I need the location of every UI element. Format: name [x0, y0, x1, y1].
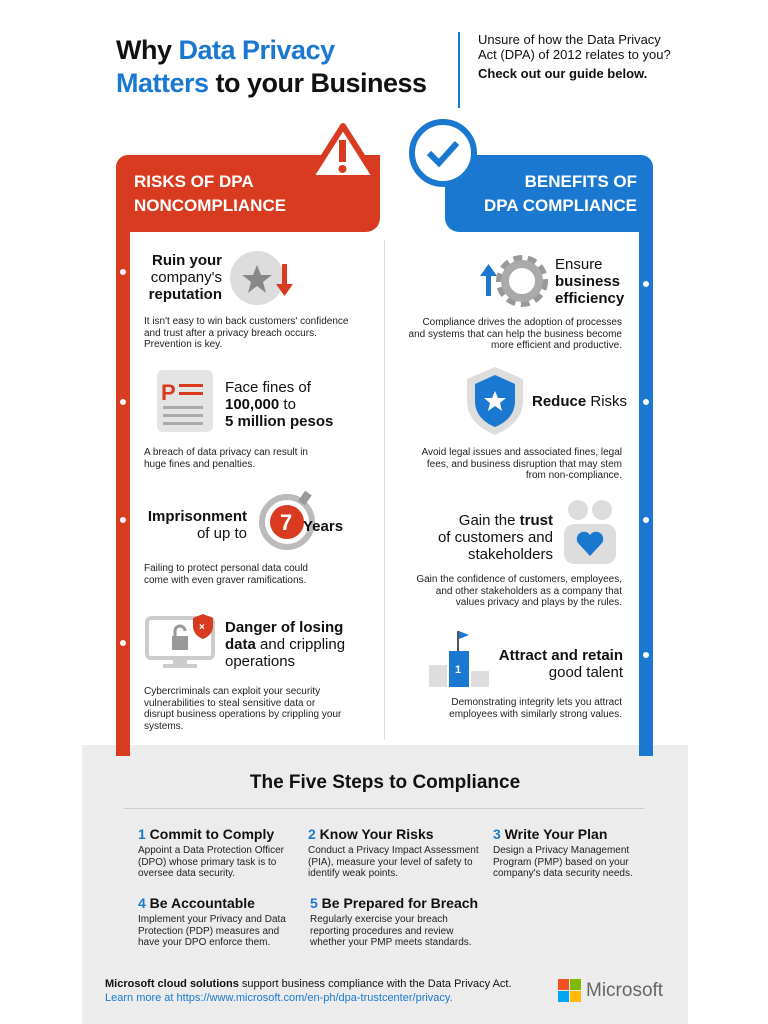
title — [116, 35, 427, 98]
icon: people heart — [564, 500, 616, 564]
risks heading — [116, 155, 380, 232]
risk 3: Years — [303, 518, 343, 535]
benefit 3: of customers and — [438, 529, 553, 546]
panel: benefits — [409, 119, 653, 756]
title: Why Data Privacy — [116, 35, 335, 65]
icon: monitor lock — [145, 614, 215, 668]
benefit 4: Demonstrating integrity lets you attract employees with similarly strong values. — [449, 697, 622, 720]
benefits heading: BENEFITS OF — [525, 172, 637, 191]
icon: document P — [157, 370, 213, 432]
risk 1: Ruin your — [152, 252, 222, 269]
risk 3: Imprisonment — [148, 508, 247, 525]
step 2: 2 Know Your Risks — [308, 826, 434, 842]
step 2 — [308, 826, 479, 879]
risk 3: Failing to protect personal data could come with even graver ramifications. — [144, 563, 308, 586]
icon: star down — [230, 251, 293, 305]
benefit 3: Gain the trust — [459, 512, 553, 529]
icon: shield star — [467, 367, 523, 435]
icon: stopwatch 7 — [259, 490, 315, 550]
microsoft logo: Microsoft — [586, 980, 663, 1001]
risk 4: operations — [225, 653, 295, 670]
risk 4 — [144, 614, 345, 732]
risk 1: It isn't easy to win back customers' confidence and trust after a privacy breach occurs. Prevention is key. — [144, 316, 348, 350]
risk 1: reputation — [149, 286, 222, 303]
step 3: 3 Write Your Plan — [493, 826, 607, 842]
benefit 2 — [422, 367, 627, 481]
icon: podium flag — [429, 631, 489, 687]
icon: check circle — [409, 119, 477, 187]
risks heading: RISKS OF DPA — [134, 172, 254, 191]
step 3: Design a Privacy Management Program (PMP) based on your company's data security needs. — [493, 845, 633, 879]
step 1: Appoint a Data Protection Officer (DPO) whose primary task is to oversee data security. — [138, 845, 284, 879]
step 1: 1 Commit to Comply — [138, 826, 274, 842]
step 5 — [310, 895, 478, 948]
gray bottom panel — [82, 745, 688, 1024]
risk 4: Cybercriminals can exploit your security vulnerabilities to steal sensitive data or disrupt business operations by crippling your systems. — [144, 686, 341, 732]
step 4: 4 Be Accountable — [138, 895, 255, 911]
five steps heading: The Five Steps to Compliance — [250, 772, 520, 793]
step 5: 5 Be Prepared for Breach — [310, 895, 478, 911]
footer text: Learn more at https://www.microsoft.com/en-ph/dpa-trustcenter/privacy. — [105, 992, 453, 1004]
benefit 3 — [416, 500, 622, 608]
title: Matters to your Business — [116, 68, 427, 98]
risk 1 — [144, 251, 348, 350]
icon: monitor lock: × — [199, 622, 205, 633]
benefit 4: Attract and retain — [499, 647, 623, 664]
risks heading: NONCOMPLIANCE — [134, 196, 286, 215]
benefit 1: efficiency — [555, 290, 624, 307]
intro text: Check out our guide below. — [478, 66, 647, 81]
benefit 1 — [408, 255, 624, 351]
risk 4: Danger of losing — [225, 619, 343, 636]
risk 4: data and crippling — [225, 636, 345, 653]
step 1 — [138, 826, 284, 879]
benefits heading — [445, 155, 653, 232]
blue bar — [639, 155, 653, 756]
icon: stopwatch 7: 7 — [280, 510, 292, 535]
benefit 4 — [429, 631, 623, 720]
step 5: Regularly exercise your breach reporting procedures and review whether your PMP meets standards. — [310, 914, 472, 948]
red bar — [116, 155, 130, 756]
risk 2: Face fines of — [225, 379, 311, 396]
step 3 — [493, 826, 633, 879]
intro text — [458, 32, 678, 108]
divider — [384, 240, 385, 740]
risk 2: 100,000 to — [225, 396, 296, 413]
benefits heading: DPA COMPLIANCE — [484, 196, 637, 215]
step 4 — [138, 895, 286, 948]
icon: podium flag: 1 — [455, 664, 461, 676]
benefit 4: good talent — [549, 664, 623, 681]
footer text: Microsoft cloud solutions support business compliance with the Data Privacy Act. — [105, 978, 512, 990]
step 2: Conduct a Privacy Impact Assessment (PIA), measure your level of safety to identify weak points. — [308, 845, 479, 879]
benefit 2: Avoid legal issues and associated fines, legal fees, and business disruption that may stem from non-compliance. — [422, 447, 622, 481]
icon: warning — [316, 123, 370, 175]
microsoft logo — [558, 979, 663, 1002]
benefit 1: Ensure — [555, 256, 603, 273]
risk 2: 5 million pesos — [225, 413, 333, 430]
footer text — [105, 978, 512, 1004]
benefit 2: Reduce Risks — [532, 393, 627, 410]
risk 3: of up to — [197, 525, 247, 542]
benefit 1: Compliance drives the adoption of processes and systems that can help the business become more efficient and productive. — [409, 317, 622, 351]
icon: document P: P — [161, 380, 176, 405]
intro text: Unsure of how the Data Privacy Act (DPA) of 2012 relates to you? — [478, 32, 671, 62]
risk 1: company's — [151, 269, 222, 286]
step 4: Implement your Privacy and Data Protection (PDP) measures and have your DPO enforce them. — [138, 914, 286, 948]
risk 3 — [144, 490, 343, 586]
benefit 3: stakeholders — [468, 546, 553, 563]
icon: gear up — [480, 255, 548, 307]
risk 2 — [144, 370, 333, 470]
panel: risks — [116, 123, 380, 756]
risk 2: A breach of data privacy can result in huge fines and penalties. — [144, 447, 308, 470]
benefit 1: business — [555, 273, 620, 290]
benefit 3: Gain the confidence of customers, employees, and other stakeholders as a company that values privacy and plays by the rules. — [416, 574, 622, 608]
